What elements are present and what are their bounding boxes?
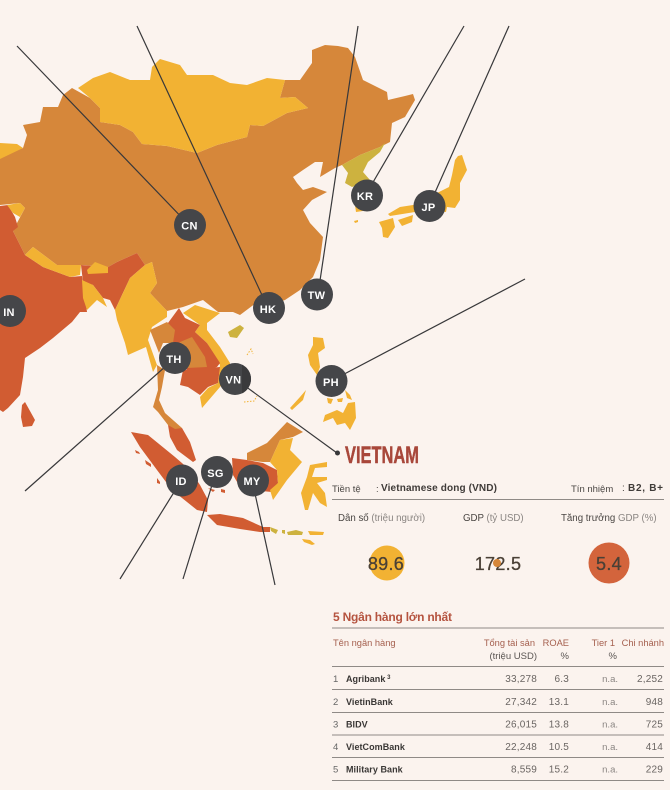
country: India northeast (81, 253, 145, 310)
marker: TH (159, 342, 191, 374)
row: VietComBank (333, 742, 663, 753)
map of Asia (0, 45, 467, 545)
stat: GDP growth: Tăng trưởng GDP (%) (561, 513, 657, 524)
marker: HK (253, 292, 285, 324)
marker: JP (414, 190, 446, 222)
table header: (triệu USD) (489, 651, 537, 662)
country: Vietnam (183, 305, 230, 408)
row: Agribank: 6.3 (554, 674, 569, 685)
country: Bhutan (87, 262, 108, 274)
row: VietinBank: n.a. (602, 697, 618, 708)
row: VietinBank: 2 (333, 697, 338, 708)
country: Hainan (228, 325, 244, 338)
row: Agribank: n.a. (602, 674, 618, 685)
country: Kashmir area (7, 203, 25, 217)
currency and rating row: Tiền tệ (332, 484, 361, 495)
country: Thailand north (150, 322, 175, 353)
country: Lesser Sunda islands (270, 527, 324, 545)
row: VietComBank: 414 (646, 742, 663, 753)
marker: CN: CN (181, 220, 198, 232)
row: VietinBank: VietinBank (346, 697, 394, 707)
row: Military Bank: 5 (333, 764, 338, 776)
currency and rating row: Tín nhiệm (571, 484, 613, 495)
table: top 5 banks (332, 628, 664, 780)
marker: SG: SG (207, 468, 224, 480)
country: Laos (168, 308, 220, 375)
marker: KR (351, 180, 383, 212)
row: Military Bank (333, 764, 663, 776)
country: Myanmar (115, 262, 167, 372)
row: BIDV: 3 (333, 720, 338, 730)
row: VietComBank: VietComBank (346, 742, 406, 752)
heading: top 5 banks: 5 Ngân hàng lớn nhất (333, 610, 452, 624)
country: Java (207, 514, 270, 532)
country: Malay peninsula north (153, 365, 182, 430)
row: Agribank: 2,252 (637, 674, 663, 685)
row: Agribank (333, 674, 663, 685)
row: BIDV: 13.8 (549, 720, 569, 730)
marker: HK: HK (260, 304, 276, 316)
marker: KR: KR (357, 191, 373, 203)
stat: population: Dân số (triệu người) (338, 513, 425, 524)
stat: GDP growth (561, 513, 657, 584)
table header: Tier 1 (592, 638, 615, 648)
currency and rating row (332, 483, 664, 500)
currency and rating row: : (622, 483, 625, 494)
row: VietComBank: 22,248 (505, 742, 537, 753)
row: BIDV: BIDV (346, 720, 368, 730)
row: VietComBank: n.a. (602, 742, 618, 753)
table header: ROAE (543, 638, 569, 648)
marker: IN: IN (3, 307, 15, 319)
row: Agribank: Agribank (346, 674, 385, 684)
marker: JP: JP (421, 202, 436, 214)
table header: Chi nhánh (622, 638, 664, 648)
marker: TW (301, 278, 333, 310)
row: Agribank: 3 (385, 675, 391, 681)
marker: VN: VN (226, 374, 241, 386)
country: Bangladesh (82, 280, 107, 310)
table header: Tổng tài sản (484, 638, 535, 648)
stat: population (338, 513, 425, 580)
country: Sri Lanka (21, 402, 35, 427)
table header: % (609, 651, 618, 662)
marker: PH: PH (323, 377, 339, 389)
country: peninsular Malaysia (168, 425, 196, 462)
country: Central Asia fragment (0, 143, 23, 159)
country: India (0, 205, 87, 412)
country: East Kalimantan (270, 438, 302, 500)
country: Sulawesi (301, 462, 327, 510)
country: Philippines (290, 337, 356, 430)
table header (333, 638, 664, 662)
country: Mongolia (78, 59, 308, 153)
marker: TW: TW (308, 290, 326, 302)
stat: GDP: 172.5 (475, 554, 521, 574)
country: Kalimantan (232, 458, 278, 492)
row: BIDV: 26,015 (505, 720, 537, 730)
country: China (0, 45, 415, 315)
country: Sarawak and Sabah (247, 422, 303, 462)
marker: VN (219, 363, 251, 395)
table header: % (561, 651, 570, 662)
row: VietComBank: 10.5 (549, 742, 569, 753)
country: Sumatra (131, 432, 208, 512)
marker: CN (174, 209, 206, 241)
row: VietinBank (333, 697, 663, 708)
currency and rating row: Vietnamese dong (VND) (381, 483, 497, 494)
row: Military Bank: Military Bank (346, 764, 404, 774)
title: Vietnam: VIETNAM (345, 442, 419, 469)
row: VietinBank: 27,342 (505, 697, 537, 708)
country: Cambodia (180, 367, 220, 395)
currency and rating row: B2, B+ (628, 483, 663, 494)
row: VietinBank: 13.1 (549, 697, 569, 708)
row: Military Bank: 15.2 (549, 764, 569, 776)
country: North Korea (342, 143, 385, 187)
South China Sea dotted islands (244, 349, 257, 402)
row: VietComBank: 4 (333, 742, 338, 753)
row: Military Bank: 8,559 (511, 764, 537, 776)
marker: TH: TH (166, 354, 182, 366)
marker: SG (201, 456, 233, 488)
marker: MY (237, 464, 269, 496)
country: Indonesian small islands (135, 450, 225, 493)
callout lines (17, 26, 525, 585)
stat: GDP: GDP (tỷ USD) (463, 513, 524, 524)
marker: ID (166, 464, 198, 496)
country: Nepal (25, 247, 81, 277)
row: Military Bank: 229 (646, 764, 663, 776)
row: Agribank: 1 (333, 674, 338, 685)
stat: GDP growth: 5.4 (596, 554, 622, 574)
row: VietinBank: 948 (646, 697, 663, 708)
marker: MY: MY (243, 476, 261, 488)
row: BIDV (333, 720, 663, 730)
country: Thailand center (175, 337, 207, 368)
row: Military Bank: n.a. (602, 764, 618, 776)
row: Agribank: 33,278 (505, 674, 537, 685)
table header: Tên ngân hàng (333, 638, 396, 648)
currency and rating row: : (376, 484, 379, 495)
stat: GDP (463, 513, 524, 574)
country: South Korea (354, 205, 365, 223)
marker: ID: ID (175, 476, 187, 488)
marker: PH (316, 365, 348, 397)
country: Japan (379, 155, 467, 238)
row: BIDV: n.a. (602, 720, 618, 730)
stat: population: 89.6 (368, 554, 404, 574)
marker: IN (0, 295, 26, 327)
row: BIDV: 725 (646, 720, 663, 730)
